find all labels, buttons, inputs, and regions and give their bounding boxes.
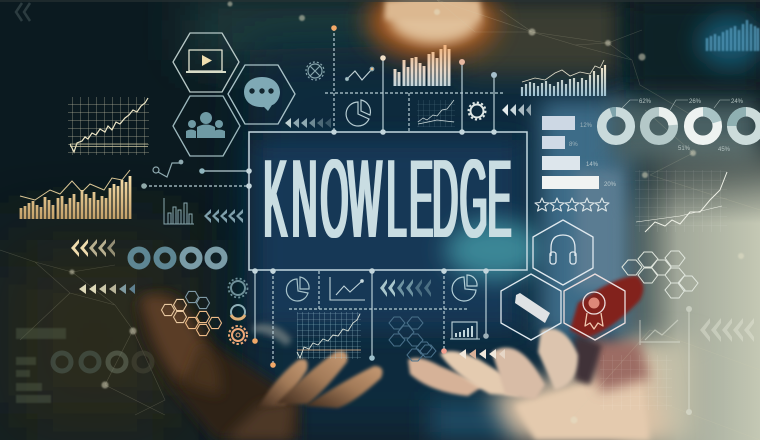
arrows: triangles left: [79, 284, 135, 294]
star rating: [535, 198, 609, 211]
right hand: [408, 276, 670, 440]
arrows row: [204, 209, 243, 223]
donut labels: [622, 99, 744, 153]
donut labels: 45%: [718, 147, 731, 153]
gear icon white: [468, 102, 486, 120]
donut labels: 62%: [639, 99, 652, 105]
arrows under trend: [285, 118, 331, 128]
central frame with connectors: [141, 25, 527, 368]
arrows on right hand fingers: [459, 349, 505, 359]
line grid chart top left: [68, 97, 149, 155]
horizontal bar chart: 14%: [586, 162, 599, 168]
faded panels lower left: [16, 328, 66, 403]
faded charts on right: [640, 306, 692, 415]
bottom pie left: [286, 277, 309, 301]
horizontal bar chart: 20%: [604, 182, 617, 188]
arrows: gold chevrons: [71, 239, 115, 257]
line grid right: [635, 170, 727, 232]
red object on fingertip: [570, 276, 643, 338]
bottom pie right: [452, 275, 477, 301]
peach bar chart top: [395, 45, 449, 86]
blurred bar chart top right: [707, 20, 758, 51]
gears left: [228, 278, 248, 344]
left hand: [137, 294, 382, 440]
donut labels: 26%: [689, 99, 702, 105]
laptop chart icon: [450, 322, 480, 339]
small line grid top center: [417, 100, 455, 127]
donut row left: [130, 250, 224, 266]
hexagon: chat bubble: [228, 65, 295, 124]
honeycomb bottom: [389, 317, 436, 361]
small bar icon left of frame: [164, 198, 194, 224]
hexagon: award ribbon: [564, 274, 625, 340]
horizontal bar chart: [542, 116, 617, 189]
gold bar chart left: [20, 170, 130, 219]
large line grid bottom: [297, 312, 361, 359]
bottom arrows blue: [380, 279, 431, 297]
small gear and trend line top: [306, 62, 374, 80]
hexagon: people group: [173, 96, 240, 156]
pie icon top: [346, 100, 370, 126]
donut labels: 51%: [678, 146, 691, 152]
hexagon: headphones: [533, 220, 593, 285]
faded chevrons top left: [16, 3, 30, 21]
faded grid lower right: [600, 355, 672, 410]
faded donuts lower left: [53, 353, 152, 371]
donut charts row right: [602, 107, 760, 145]
faded chevrons far right: [700, 318, 754, 342]
neck skin glow: [366, 0, 498, 60]
bottom trend frame: [330, 277, 365, 300]
small trend line icon: [153, 160, 183, 177]
horizontal bar chart: 12%: [580, 123, 593, 129]
blue-white bar chart right: [522, 60, 605, 96]
honeycomb right: [622, 251, 698, 298]
hexagon: pencil: [501, 274, 561, 340]
hexagon: video lesson: [173, 33, 239, 92]
donut labels: 24%: [731, 99, 744, 105]
horizontal bar chart: 8%: [569, 142, 578, 148]
honeycomb on left hand: [162, 291, 222, 336]
title: KNOWLEDGE: KNOWLEDGE: [263, 137, 511, 261]
arrows top right: [502, 104, 531, 116]
